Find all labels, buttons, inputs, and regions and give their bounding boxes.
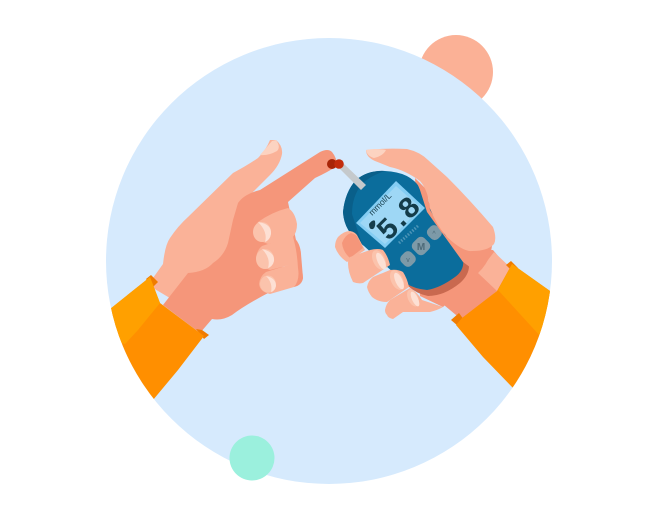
meter screen	[360, 186, 421, 244]
icon: drop on screen	[369, 220, 375, 229]
left sleeve	[111, 275, 209, 399]
finger nail 2	[369, 248, 389, 272]
meter button minus: v	[406, 257, 410, 264]
left finger nail 1	[253, 222, 271, 242]
meter screen frame	[356, 181, 425, 248]
drop on fingertip	[327, 159, 337, 169]
right back finger	[335, 231, 365, 262]
glucose meter	[343, 171, 469, 296]
finger nail 4	[405, 288, 421, 308]
right wrist highlight	[478, 252, 511, 291]
meter indicator dots	[399, 225, 419, 243]
right finger 3	[367, 270, 409, 302]
thumb nail	[366, 149, 386, 158]
left sleeve main	[111, 280, 204, 399]
left cuff tab top	[146, 275, 158, 286]
meter body	[343, 171, 463, 290]
test strip	[340, 164, 366, 190]
meter lower edge	[408, 205, 469, 296]
left thumb nail	[260, 140, 279, 155]
right thumb	[366, 149, 495, 251]
right finger 2	[348, 249, 390, 283]
right sleeve highlight	[498, 264, 550, 336]
palm behind meter	[415, 178, 472, 307]
right cuff tab top	[506, 261, 518, 268]
meter unit label: mmol/L	[367, 190, 394, 217]
left finger nail 2	[256, 249, 274, 269]
drop on strip	[334, 159, 344, 169]
finger nail 3	[387, 268, 407, 292]
left sleeve highlight	[111, 277, 160, 344]
decorative peach circle	[419, 35, 493, 109]
left finger 1	[254, 208, 297, 244]
back finger shade	[342, 233, 363, 258]
left finger 3	[259, 262, 303, 294]
right hand front	[335, 149, 495, 319]
meter top shade	[343, 171, 385, 244]
right sleeve main	[456, 268, 550, 388]
left finger 2	[256, 236, 301, 270]
left finger nail 3	[260, 276, 276, 292]
thumb shade	[415, 178, 492, 273]
left hand pointing finger	[148, 140, 337, 333]
left cuff tab bottom	[196, 329, 209, 339]
meter button plus: ^	[432, 231, 436, 238]
right wrist shadow	[440, 250, 510, 320]
meter button M: M	[417, 242, 425, 253]
right hand	[415, 178, 511, 320]
left hand back	[148, 140, 282, 310]
illustration: blood glucose test	[106, 35, 552, 484]
right cuff tab bottom	[451, 313, 462, 325]
right finger 4 and palm	[385, 288, 443, 319]
decorative mint circle	[230, 436, 274, 480]
left finger shadows	[293, 237, 303, 287]
meter reading: 5.8	[371, 192, 428, 249]
left palm and index finger	[163, 150, 337, 333]
blood drop	[327, 159, 344, 169]
main background circle	[106, 38, 552, 484]
right sleeve	[451, 261, 550, 388]
